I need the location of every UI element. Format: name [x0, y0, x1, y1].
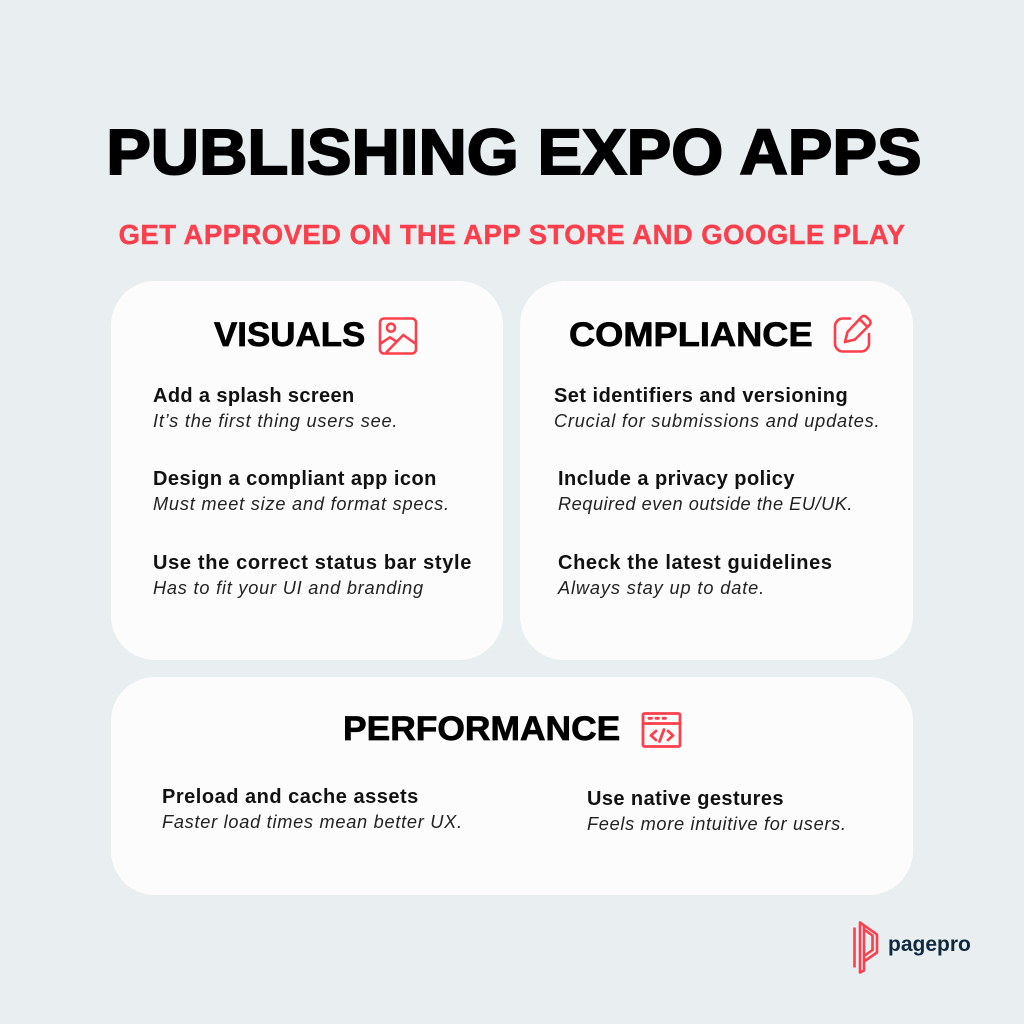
item: splash screen: Add a splash screen [153, 385, 355, 407]
item: preload: Faster load times mean better UX. [162, 812, 463, 832]
panel: compliance [520, 281, 913, 660]
item: identifiers [554, 385, 880, 431]
item: status bar: Has to fit your UI and branding [153, 578, 424, 598]
item: preload: Preload and cache assets [162, 786, 419, 808]
heading: compliance: COMPLIANCE [569, 316, 813, 354]
item: status bar: Use the correct status bar style [153, 552, 472, 574]
item: identifiers: Crucial for submissions and updates. [554, 411, 880, 431]
title: PUBLISHING EXPO APPS [106, 116, 921, 188]
item: privacy policy: Include a privacy policy [558, 468, 795, 490]
heading: visuals: VISUALS [214, 316, 365, 354]
item: splash screen: It’s the first thing users see. [153, 411, 398, 431]
icon: image [378, 317, 418, 355]
item: splash screen [153, 385, 398, 431]
logo: pagepro [853, 921, 971, 974]
logo mark [853, 921, 878, 974]
item: preload [162, 786, 463, 832]
item: gestures: Use native gestures [587, 788, 784, 810]
item: app icon: Must meet size and format specs. [153, 494, 450, 514]
logo wordmark: pagepro [888, 933, 971, 956]
item: identifiers: Set identifiers and versioning [554, 385, 848, 407]
item: guidelines: Always stay up to date. [558, 578, 765, 598]
subtitle: GET APPROVED ON THE APP STORE AND GOOGLE PLAY [119, 219, 905, 250]
item: app icon [153, 468, 450, 514]
item: guidelines: Check the latest guidelines [558, 552, 833, 574]
item: app icon: Design a compliant app icon [153, 468, 437, 490]
panel: performance [111, 677, 913, 895]
item: guidelines [557, 552, 833, 598]
icon: code window [642, 712, 682, 748]
panel: visuals [111, 281, 503, 660]
item: privacy policy: Required even outside the EU/UK. [558, 494, 853, 514]
item: gestures: Feels more intuitive for users. [587, 814, 847, 834]
item: privacy policy [558, 468, 853, 514]
icon: edit [834, 314, 872, 353]
heading: performance: PERFORMANCE [343, 710, 620, 748]
item: status bar [153, 552, 472, 598]
item: gestures [587, 788, 847, 834]
